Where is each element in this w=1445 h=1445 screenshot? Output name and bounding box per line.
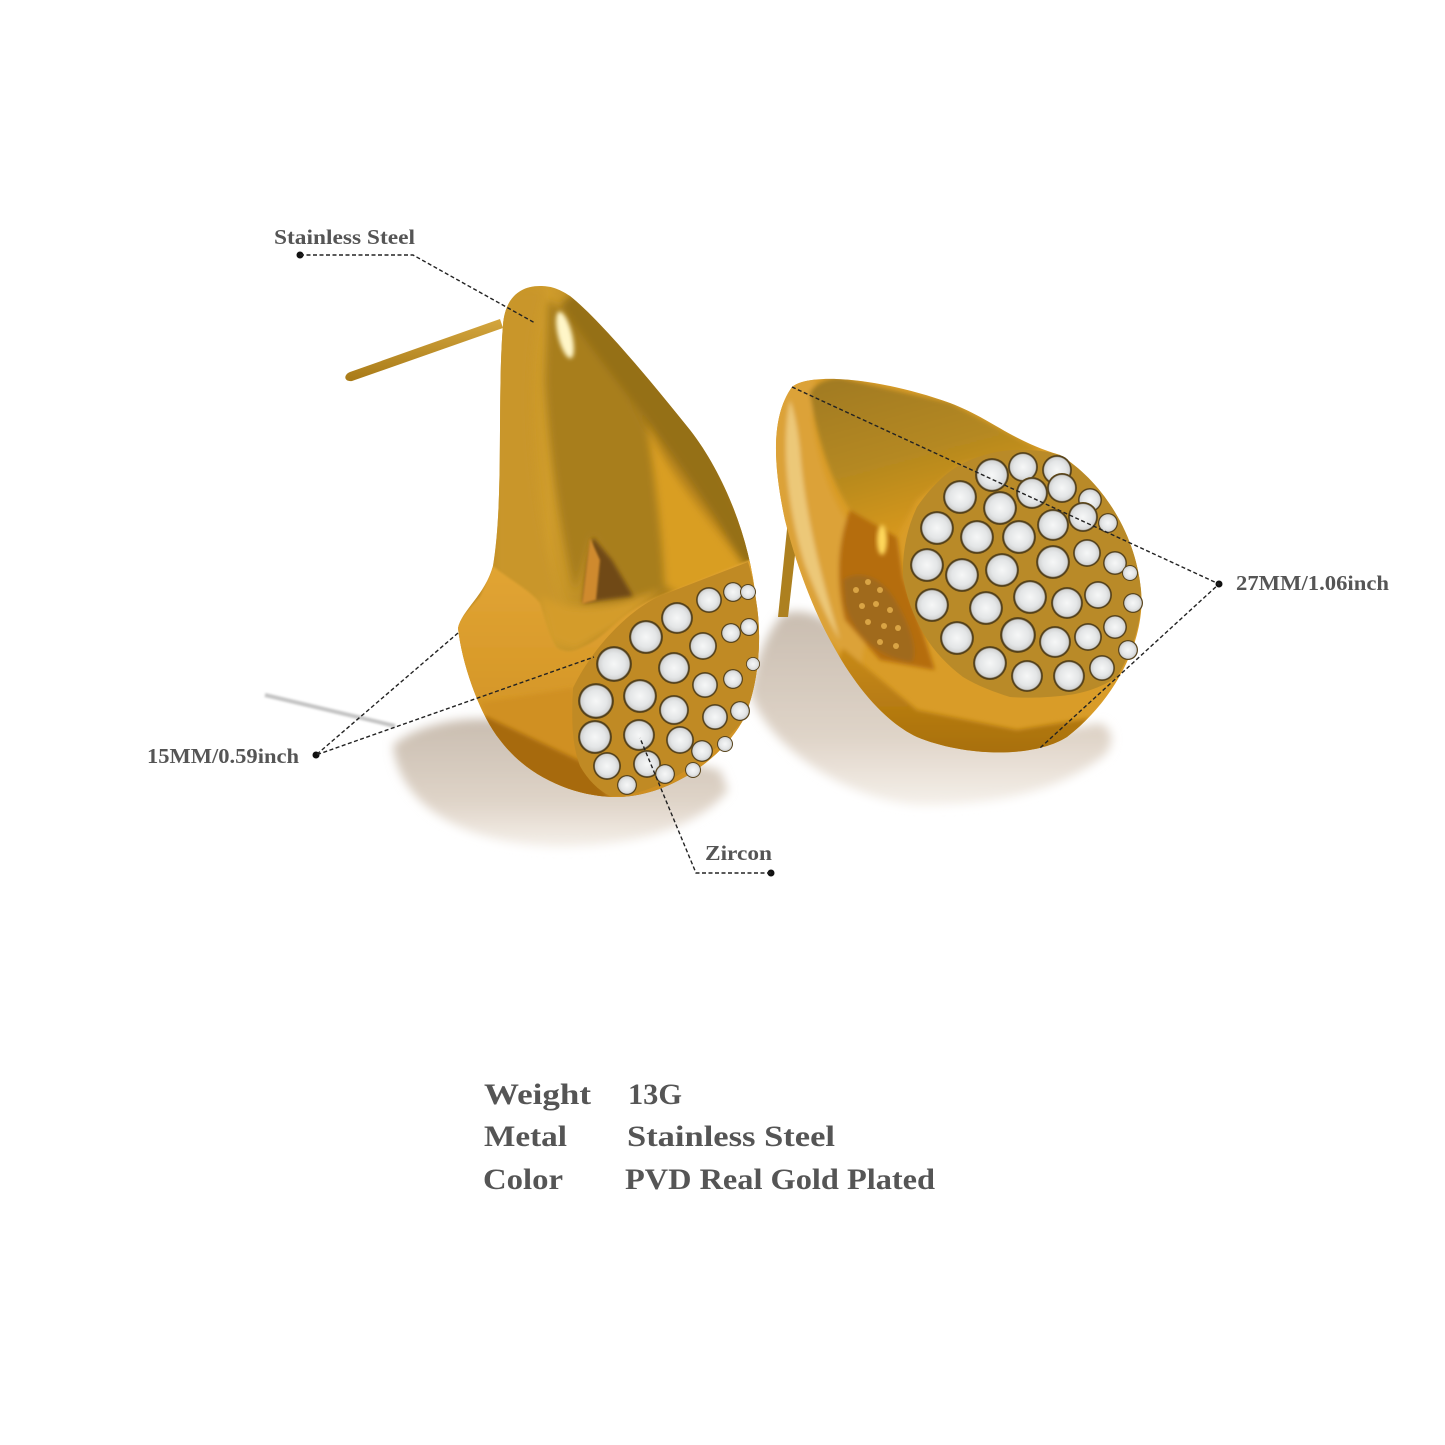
callout: Zircon [640,738,774,876]
spec row: color [483,1163,935,1196]
callout: 15MM/0.59inch: 15MM/0.59inch [147,744,299,768]
teardrop body: left [458,286,759,797]
spec row: color: PVD Real Gold Plated [625,1163,935,1196]
zircon stones: right [910,452,1143,692]
callout: 15MM/0.59inch [147,633,594,768]
spec row: weight: 13G [628,1078,682,1111]
reflection dots: right [853,579,901,649]
spec row: metal: Stainless Steel [627,1120,835,1153]
body shading: left [450,290,770,805]
earring post: left [345,319,503,381]
teardrop body: right [776,379,1142,752]
callout: 27MM/1.06inch width [792,387,1389,748]
body shading: right [765,375,1090,760]
spec row: weight: Weight [484,1078,591,1111]
earring: left [345,286,770,805]
callout: Zircon: Zircon [705,841,772,865]
callout: Stainless Steel [274,225,535,323]
infographic canvas [148,230,1389,1190]
zircon stones: left [578,582,760,795]
spec row: metal [484,1120,835,1153]
callout: 27MM/1.06inch width: 27MM/1.06inch [1236,571,1389,595]
collar: left [450,559,770,800]
spec row: color: Color [483,1163,563,1196]
pave panel: left [572,562,759,796]
earring: right [765,375,1143,760]
pave disc: right [903,450,1141,698]
specification table [483,1078,935,1196]
spec row: metal: Metal [484,1120,567,1153]
spec row: weight [484,1078,682,1111]
shadows under earrings [265,612,1111,847]
earring post: right [778,500,799,617]
callout: Stainless Steel: Stainless Steel [274,225,415,249]
